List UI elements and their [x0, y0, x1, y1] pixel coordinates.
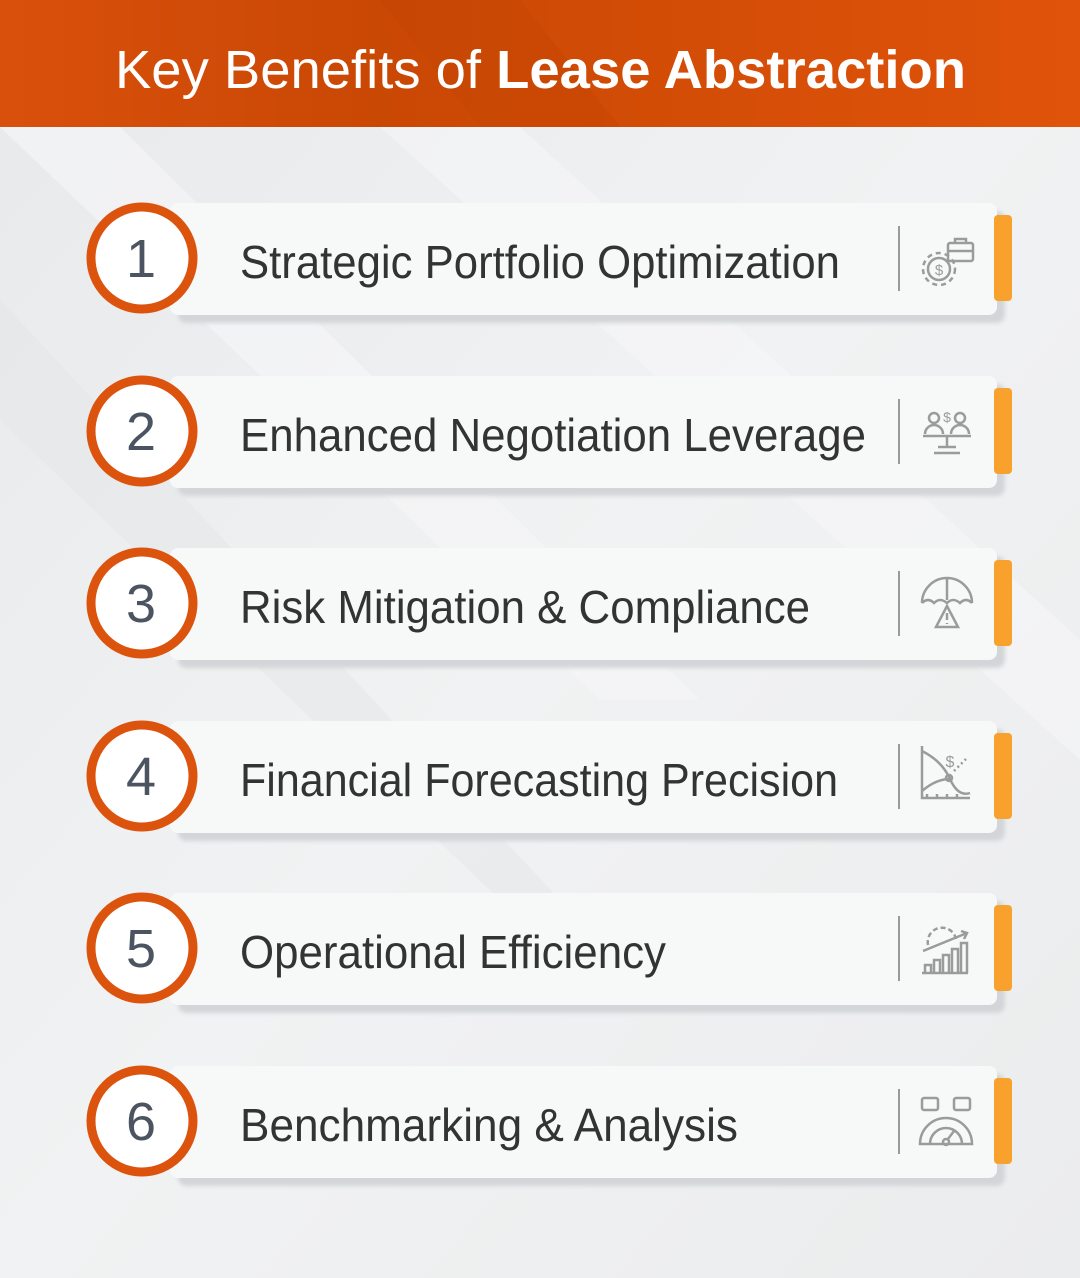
- row 5: [91, 893, 1012, 1013]
- row 2: Enhanced Negotiation Leverage: [240, 409, 866, 461]
- row 6: [91, 1066, 1012, 1186]
- row 4: Financial Forecasting Precision: [240, 754, 838, 806]
- row 4: [91, 721, 1012, 841]
- row 5: 5: [126, 919, 156, 979]
- title: Key Benefits of Lease Abstraction: [115, 40, 966, 100]
- header: [0, 0, 1080, 127]
- row 4: 4: [126, 747, 156, 807]
- icon: forecast curve: [922, 746, 970, 798]
- icon: umbrella warning: [922, 578, 972, 627]
- row 1: [91, 203, 1012, 323]
- row 6: 6: [126, 1092, 156, 1152]
- row 2: 2: [126, 402, 156, 462]
- icon: forecast curve: $: [946, 754, 955, 771]
- icon: scale people: [923, 409, 971, 453]
- row 2: [91, 376, 1012, 496]
- icon: gauge chat: [920, 1098, 972, 1145]
- row 6: Benchmarking & Analysis: [240, 1099, 738, 1151]
- row 3: Risk Mitigation & Compliance: [240, 581, 810, 633]
- icon: gear dollar briefcase: [923, 239, 973, 285]
- row 3: 3: [126, 574, 156, 634]
- icon: gear dollar briefcase: $: [935, 262, 944, 279]
- row 5: Operational Efficiency: [240, 926, 666, 978]
- row 1: 1: [126, 229, 156, 289]
- row 1: Strategic Portfolio Optimization: [240, 236, 840, 288]
- icon: gear chart: [922, 928, 968, 973]
- icon: scale people: $: [943, 409, 951, 425]
- row 3: [91, 548, 1012, 668]
